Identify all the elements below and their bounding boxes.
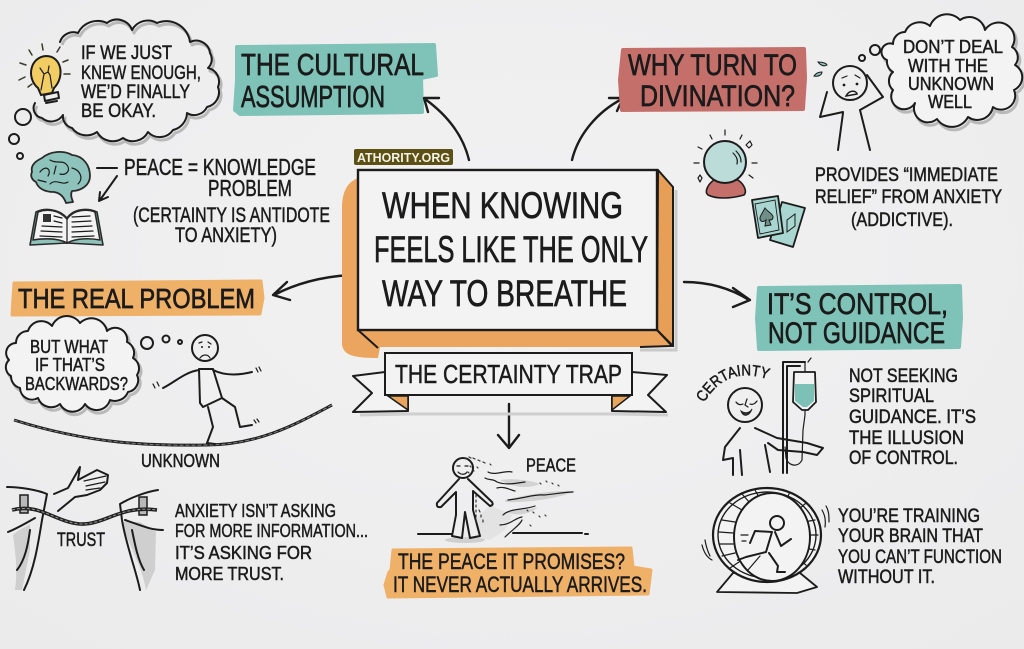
- thought bubble: don't deal with the unknown: WITH THE: [908, 55, 988, 76]
- illustration: tightrope walker: [14, 335, 332, 445]
- thought bubble: knew enough: IF WE JUST: [81, 42, 172, 64]
- illustration: figure dissolving into peace: [418, 456, 588, 543]
- thought bubble: don't deal with the unknown: [859, 14, 1024, 130]
- icon: crystal ball: [694, 130, 757, 198]
- arrow: down to peace: [498, 404, 519, 448]
- heading: it's control, not guidance: [757, 286, 961, 350]
- thought bubble: don't deal with the unknown: DON’T DEAL: [903, 36, 1003, 57]
- text: training your brain: WITHOUT IT.: [838, 567, 935, 588]
- thought bubble: backwards: [6, 316, 182, 415]
- title box: WHEN KNOWING: [382, 185, 623, 226]
- arrow: to divination: [572, 98, 623, 160]
- callout: never arrives: IT NEVER ACTUALLY ARRIVES.: [393, 572, 647, 597]
- icon: tarot cards: [752, 196, 805, 247]
- text: training your brain: YOUR BRAIN THAT: [838, 526, 983, 547]
- heading: the cultural assumption: ASSUMPTION: [241, 79, 385, 114]
- arrow: brain to book: [97, 168, 117, 201]
- title box: FEELS LIKE THE ONLY: [374, 229, 648, 270]
- arrow: to cultural assumption: [424, 98, 469, 160]
- thought bubble: knew enough: BE OKAY.: [81, 100, 156, 122]
- text: anxiety isn't asking: ANXIETY ISN’T ASKING: [175, 500, 336, 521]
- heading: why turn to divination: WHY TURN TO: [628, 49, 797, 82]
- thought bubble: backwards: BACKWARDS?: [25, 373, 128, 394]
- illustration: figure dissolving into peace: PEACE: [526, 456, 576, 476]
- text: not seeking spiritual guidance: GUIDANCE. IT’S: [849, 407, 976, 428]
- text: anxiety isn't asking: MORE TRUST.: [175, 563, 284, 584]
- text: training your brain: [838, 506, 1002, 588]
- heading: the cultural assumption: [235, 45, 436, 114]
- thought bubble: backwards: IF THAT’S: [35, 354, 105, 375]
- ribbon: the certainty trap: [353, 353, 668, 415]
- text: immediate relief: PROVIDES “IMMEDIATE: [815, 165, 998, 186]
- thought bubble: don't deal with the unknown: UNKNOWN: [908, 73, 994, 94]
- label: unknown: UNKNOWN: [141, 451, 220, 471]
- text: anxiety isn't asking: FOR MORE INFORMATION...: [175, 520, 368, 541]
- panel: the peace it promises: [385, 456, 651, 597]
- icon: person on certainty drip: [696, 357, 824, 476]
- thought bubble: knew enough: KNEW ENOUGH,: [81, 62, 201, 84]
- text: training your brain: YOU’RE TRAINING: [838, 506, 980, 527]
- text: not seeking spiritual guidance: SPIRITUAL: [849, 386, 934, 407]
- icon: worried person: [814, 62, 883, 150]
- label: certainty: CERTAINTY: [696, 364, 771, 401]
- heading: the real problem: THE REAL PROBLEM: [18, 283, 255, 314]
- title box: [342, 170, 676, 358]
- text: not seeking spiritual guidance: OF CONTROL.: [849, 448, 958, 469]
- text: anxiety isn't asking: [175, 500, 368, 584]
- thought bubble: don't deal with the unknown: WELL: [928, 91, 972, 112]
- icon: hamster wheel runner: [702, 488, 829, 593]
- text: not seeking spiritual guidance: NOT SEEKING: [849, 366, 958, 387]
- text: peace equals knowledge problem: (CERTAINTY IS ANTIDOTE: [133, 204, 330, 227]
- illustration: cliffs with rope and hand: [7, 467, 163, 590]
- title box: WAY TO BREATHE: [382, 273, 627, 314]
- heading: why turn to divination: DIVINATION?: [640, 80, 795, 113]
- text: peace equals knowledge problem: [124, 154, 330, 247]
- icon: brain: [31, 152, 90, 203]
- text: not seeking spiritual guidance: THE ILLUSION: [849, 428, 964, 449]
- heading: the cultural assumption: THE CULTURAL: [241, 47, 424, 82]
- text: anxiety isn't asking: IT’S ASKING FOR: [175, 542, 312, 563]
- panel: it's control, not guidance: [696, 284, 1002, 594]
- thought bubble: knew enough: WE’D FINALLY: [81, 81, 190, 103]
- icon: light bulb: [19, 44, 70, 103]
- thought bubble: backwards: BUT WHAT: [30, 336, 108, 357]
- arrow: to real problem: [273, 275, 349, 300]
- icon: open book: [30, 210, 103, 245]
- panel: the real problem: [6, 281, 368, 590]
- text: peace equals knowledge problem: PEACE = KNOWLEDGE: [124, 154, 316, 180]
- panel: the cultural assumption: [9, 20, 436, 247]
- watermark: athority.org: ATHORITY.ORG: [357, 150, 450, 165]
- text: not seeking spiritual guidance: [849, 366, 976, 469]
- heading: it's control, not guidance: IT’S CONTROL,: [767, 288, 948, 321]
- heading: why turn to divination: [620, 49, 805, 113]
- text: peace equals knowledge problem: PROBLEM: [208, 175, 292, 201]
- callout: never arrives: THE PEACE IT PROMISES?: [398, 549, 625, 574]
- text: immediate relief: (ADDICTIVE).: [851, 210, 953, 231]
- illustration: cliffs with rope and hand: TRUST: [57, 530, 105, 551]
- ribbon: the certainty trap: THE CERTAINTY TRAP: [395, 359, 622, 389]
- heading: it's control, not guidance: NOT GUIDANCE: [768, 317, 945, 350]
- thought bubble: knew enough: [9, 20, 221, 159]
- callout: never arrives: [385, 548, 651, 597]
- arrow: to control: [684, 282, 750, 307]
- panel: why turn to divination: [620, 14, 1024, 247]
- text: immediate relief: [815, 165, 1002, 231]
- text: peace equals knowledge problem: TO ANXIETY): [175, 224, 277, 247]
